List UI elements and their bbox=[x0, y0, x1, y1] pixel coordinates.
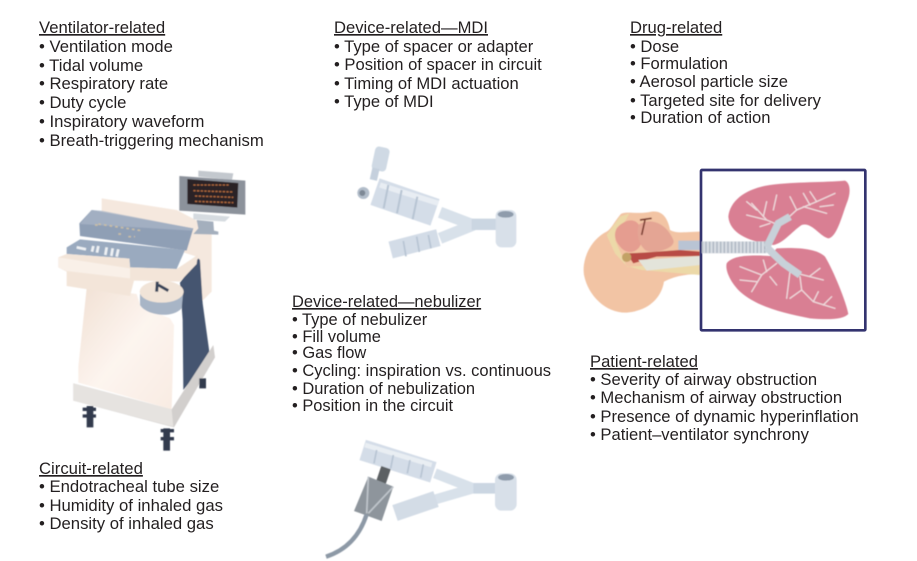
heading block: device-related MDI bbox=[334, 18, 542, 111]
lungs frame bbox=[701, 170, 865, 330]
heading block: circuit-related: • Density of inhaled gas bbox=[39, 514, 214, 533]
heading block: device-related MDI: Device-related—MDI bbox=[334, 18, 488, 37]
heading block: drug-related bbox=[630, 18, 822, 127]
heading block: device-related MDI: • Type of spacer or adapter bbox=[334, 37, 534, 56]
heading block: patient-related: • Patient–ventilator synchrony bbox=[590, 425, 810, 444]
heading block: device-related MDI: • Timing of MDI actuation bbox=[334, 74, 519, 93]
heading block: device-related nebulizer: • Fill volume bbox=[292, 328, 381, 346]
control buttons bbox=[77, 246, 118, 257]
heading block: drug-related: • Aerosol particle size bbox=[630, 72, 788, 91]
heading block: device-related nebulizer: • Gas flow bbox=[292, 344, 366, 362]
heading block: device-related nebulizer: • Cycling: inspiration vs. continuous bbox=[292, 362, 551, 380]
heading block: device-related nebulizer: • Type of nebulizer bbox=[292, 311, 428, 329]
humidifier cup bbox=[140, 291, 183, 315]
heading block: drug-related: • Dose bbox=[630, 37, 679, 56]
heading block: drug-related: Drug-related bbox=[630, 18, 722, 37]
heading block: ventilator-related: • Respiratory rate bbox=[39, 74, 168, 93]
heading block: ventilator-related: Ventilator-related bbox=[39, 18, 165, 37]
heading block: patient-related: • Severity of airway obstruction bbox=[590, 370, 817, 389]
illustration: head, airway and lungs bbox=[584, 170, 865, 330]
heading block: patient-related: • Presence of dynamic hyperinflation bbox=[590, 407, 859, 426]
heading block: drug-related: • Formulation bbox=[630, 54, 728, 73]
lungs bbox=[702, 181, 850, 319]
heading block: circuit-related: Circuit-related bbox=[39, 459, 143, 478]
heading block: device-related nebulizer: • Duration of nebulization bbox=[292, 380, 475, 398]
heading block: drug-related: • Duration of action bbox=[630, 108, 770, 127]
monitor bbox=[179, 171, 245, 235]
wheels bbox=[90, 378, 203, 451]
heading block: circuit-related bbox=[39, 459, 223, 533]
heading block: circuit-related: • Endotracheal tube size bbox=[39, 477, 219, 496]
heading block: circuit-related: • Humidity of inhaled gas bbox=[39, 496, 223, 515]
heading block: device-related nebulizer bbox=[292, 293, 551, 415]
heading block: device-related nebulizer: Device-related—nebulizer bbox=[292, 293, 482, 311]
heading block: patient-related: Patient-related bbox=[590, 352, 698, 371]
heading block: patient-related: • Mechanism of airway obstruction bbox=[590, 388, 842, 407]
illustration: MDI spacer circuit bbox=[357, 146, 516, 256]
heading block: device-related nebulizer: • Position in the circuit bbox=[292, 397, 454, 415]
illustration: nebulizer circuit bbox=[326, 445, 517, 557]
heading block: ventilator-related: • Ventilation mode bbox=[39, 37, 173, 56]
heading block: ventilator-related bbox=[39, 18, 264, 150]
heading block: device-related MDI: • Position of spacer in circuit bbox=[334, 55, 542, 74]
heading block: ventilator-related: • Duty cycle bbox=[39, 93, 126, 112]
head profile bbox=[584, 211, 702, 313]
heading block: device-related MDI: • Type of MDI bbox=[334, 92, 434, 111]
illustration: mechanical ventilator bbox=[58, 171, 245, 451]
heading block: ventilator-related: • Tidal volume bbox=[39, 56, 143, 75]
heading block: drug-related: • Targeted site for delivery bbox=[630, 91, 822, 110]
heading block: ventilator-related: • Breath-triggering mechanism bbox=[39, 131, 264, 150]
trachea and bronchi bbox=[702, 229, 767, 265]
heading block: patient-related bbox=[590, 352, 859, 444]
heading block: ventilator-related: • Inspiratory waveform bbox=[39, 112, 204, 131]
